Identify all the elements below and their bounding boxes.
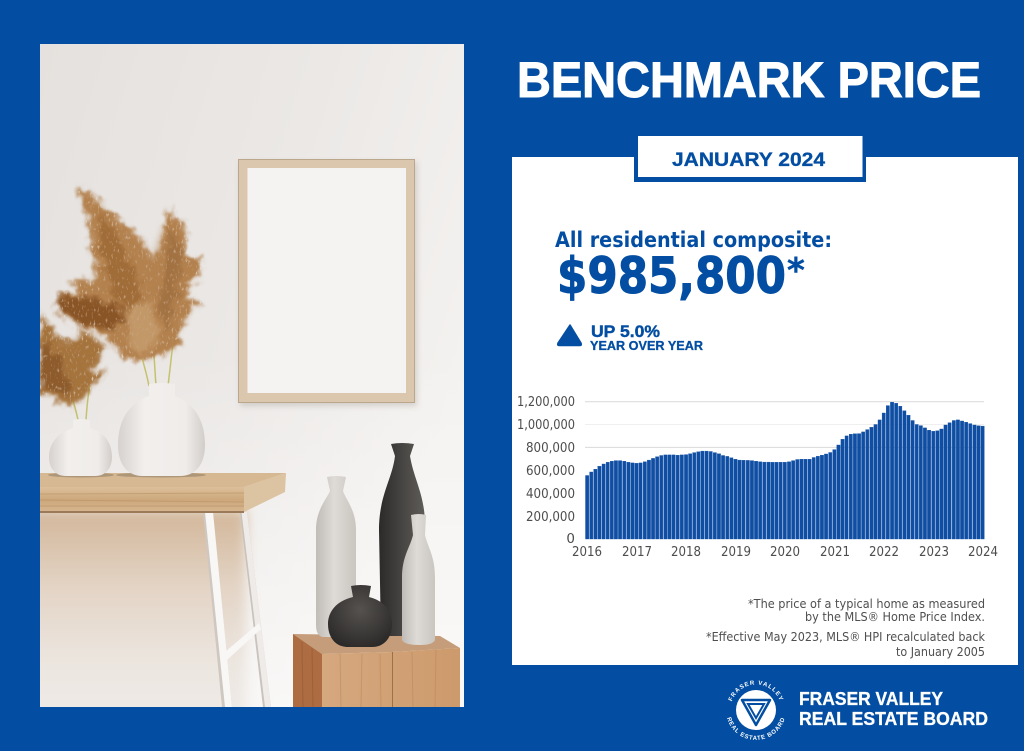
pampas grass xyxy=(40,185,200,420)
price: $985,800 xyxy=(557,247,786,305)
x axis labels: 2024 xyxy=(968,544,998,560)
x axis labels: 2019 xyxy=(721,544,751,560)
y axis labels: 200,000 xyxy=(526,509,575,525)
y axis labels: 1,200,000 xyxy=(517,394,575,410)
footnotes: to January 2005 xyxy=(896,644,985,659)
y axis labels: 800,000 xyxy=(526,440,575,456)
x axis labels: 2022 xyxy=(869,544,899,560)
pampas soft base xyxy=(42,200,192,395)
photo: interior still life xyxy=(20,44,464,730)
footnotes xyxy=(706,596,986,659)
large white vase xyxy=(116,383,206,478)
year over year change: YEAR OVER YEAR xyxy=(590,339,703,353)
small white vase xyxy=(48,419,114,478)
y axis labels xyxy=(517,394,575,547)
x axis labels: 2018 xyxy=(671,544,701,560)
pedestal with vases xyxy=(293,443,460,707)
panel: benchmark price card xyxy=(512,135,1018,665)
year over year change xyxy=(590,322,703,353)
date tab: JANUARY 2024 xyxy=(672,149,825,171)
pedestal block xyxy=(293,634,460,707)
table legs xyxy=(203,512,271,707)
x axis labels: 2017 xyxy=(622,544,652,560)
tall dark vase xyxy=(379,443,425,636)
round dark vase xyxy=(328,585,392,647)
price: * xyxy=(787,251,805,291)
logo wordmark: REAL ESTATE BOARD xyxy=(799,708,988,729)
logo: Fraser Valley Real Estate Board xyxy=(727,680,988,740)
logo seal: REAL ESTATE BOARD xyxy=(727,717,784,740)
console table xyxy=(40,473,286,707)
date tab xyxy=(634,135,866,182)
logo wordmark: FRASER VALLEY xyxy=(799,688,944,709)
title: BENCHMARK PRICE xyxy=(517,52,981,108)
x axis labels: 2016 xyxy=(572,544,602,560)
tall white vase xyxy=(316,476,356,637)
picture frame xyxy=(238,159,417,406)
bar chart xyxy=(517,394,998,560)
icon: up triangle xyxy=(558,325,581,346)
composite label: All residential composite: xyxy=(555,228,832,252)
y axis labels: 0 xyxy=(566,531,575,547)
x axis labels: 2020 xyxy=(770,544,800,560)
footnotes: *The price of a typical home as measured xyxy=(748,596,985,611)
footnotes: by the MLS® Home Price Index. xyxy=(805,609,985,624)
y axis labels: 400,000 xyxy=(526,486,575,502)
year over year change: UP 5.0% xyxy=(591,322,660,341)
y axis labels: 600,000 xyxy=(526,463,575,479)
logo seal: FRASER VALLEY xyxy=(728,680,784,702)
short white vase xyxy=(402,514,435,645)
x axis labels xyxy=(572,544,998,560)
x axis labels: 2023 xyxy=(919,544,949,560)
y axis labels: 1,000,000 xyxy=(517,417,575,433)
logo wordmark xyxy=(799,688,988,729)
x axis labels: 2021 xyxy=(820,544,850,560)
logo seal xyxy=(727,680,784,740)
footnotes: *Effective May 2023, MLS® HPI recalculated back xyxy=(706,629,986,644)
